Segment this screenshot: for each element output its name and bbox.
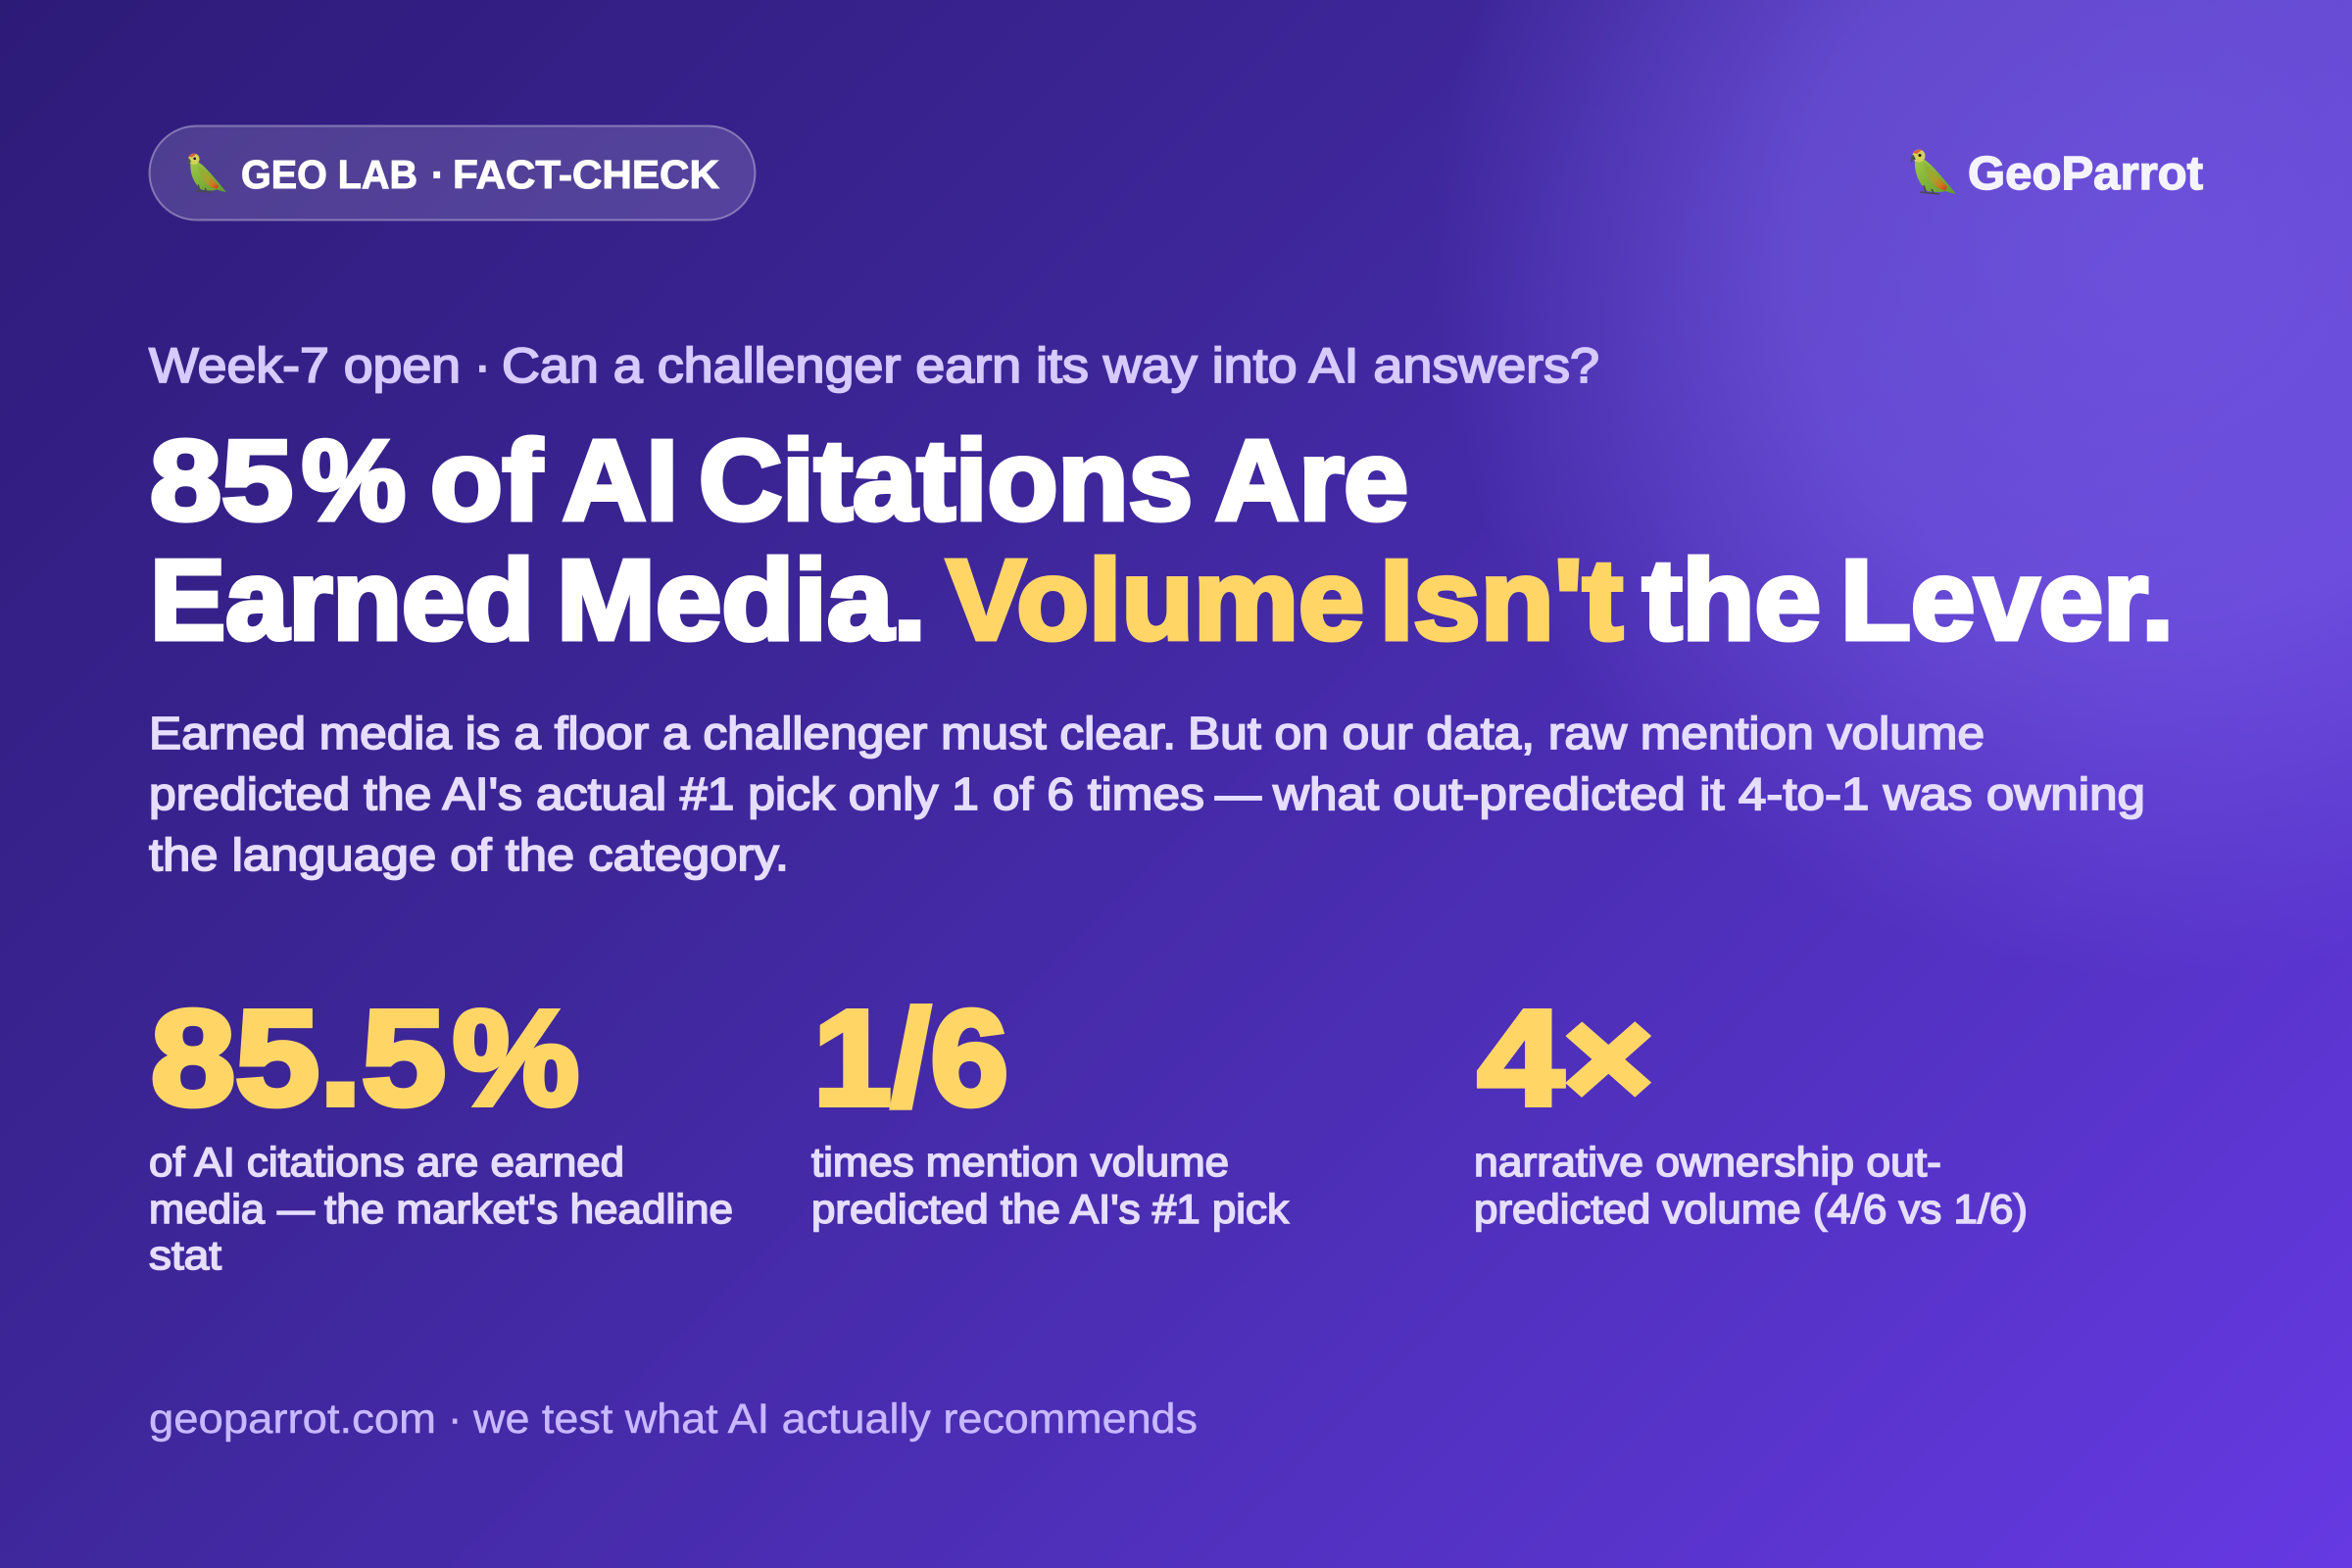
icon: parrot in badge xyxy=(187,154,226,192)
body paragraph: what out-predicted it 4-to-1 was owning xyxy=(1272,768,2145,819)
main title: 85 xyxy=(150,416,293,544)
icon: parrot in logo xyxy=(1911,149,1956,194)
body paragraph: But on our data, raw mention volume xyxy=(1188,708,1984,759)
stat label: — xyxy=(277,1186,315,1232)
stat label: predicted volume (4/6 vs 1/6) xyxy=(1474,1186,2028,1232)
main title: % xyxy=(302,416,406,544)
main title: of xyxy=(430,416,542,544)
badge text xyxy=(241,152,719,197)
footer: · xyxy=(448,1396,462,1443)
stat number: 4× xyxy=(1478,983,1653,1134)
main title: Lever. xyxy=(1840,536,2174,663)
main title: AI xyxy=(563,416,678,544)
stat: 85.5% earned media xyxy=(149,983,733,1278)
stat number: 85.5 xyxy=(151,983,446,1134)
stat label: stat xyxy=(149,1232,221,1278)
main title: Are xyxy=(1215,416,1408,544)
body paragraph: Earned media is a floor a challenger must clear. xyxy=(149,708,1176,759)
badge: GEO Lab fact-check pill xyxy=(149,125,755,220)
body paragraph xyxy=(149,708,2145,880)
stat number: % xyxy=(453,983,579,1134)
main title xyxy=(150,416,2174,663)
stat: 4x narrative ownership xyxy=(1474,983,2028,1232)
logo: GeoParrot brand xyxy=(1911,148,2203,200)
stat label xyxy=(811,1139,1290,1232)
main title: the xyxy=(1642,536,1821,663)
stat: 1/6 mention volume xyxy=(811,983,1290,1232)
main title: Isn't xyxy=(1380,536,1623,663)
main title: Media. xyxy=(557,536,926,663)
body paragraph: the language of the category. xyxy=(149,829,789,880)
main title: Citations xyxy=(699,416,1193,544)
body paragraph: — xyxy=(1215,768,1261,819)
stat number: 1/6 xyxy=(813,983,1008,1134)
footer: geoparrot.com xyxy=(149,1396,436,1443)
badge text: · xyxy=(431,152,445,197)
stat label: narrative ownership out- xyxy=(1474,1139,1941,1185)
kicker line: Can a challenger earn its way into AI answers? xyxy=(502,338,1599,393)
stat label: of AI citations are earned xyxy=(149,1139,624,1185)
stat label: times mention volume xyxy=(811,1139,1229,1185)
kicker line: Week-7 open xyxy=(149,338,461,393)
footer xyxy=(149,1396,1198,1443)
footer: we test what AI actually recommends xyxy=(472,1396,1198,1443)
stat label xyxy=(1474,1139,2028,1232)
main title: Volume xyxy=(947,536,1364,663)
stat label: the market's headline xyxy=(324,1186,733,1232)
stat number xyxy=(151,983,579,1134)
kicker line: · xyxy=(474,338,491,393)
stat label: media xyxy=(149,1186,266,1232)
body paragraph: predicted the AI's actual #1 pick only 1 of 6 times xyxy=(149,768,1204,819)
brand name: GeoParrot xyxy=(1968,148,2203,200)
badge text: GEO LAB xyxy=(241,152,417,197)
stat label xyxy=(149,1139,733,1278)
main title: Earned xyxy=(150,536,534,663)
badge text: FACT-CHECK xyxy=(453,152,719,197)
stat label: predicted the AI's #1 pick xyxy=(811,1186,1290,1232)
